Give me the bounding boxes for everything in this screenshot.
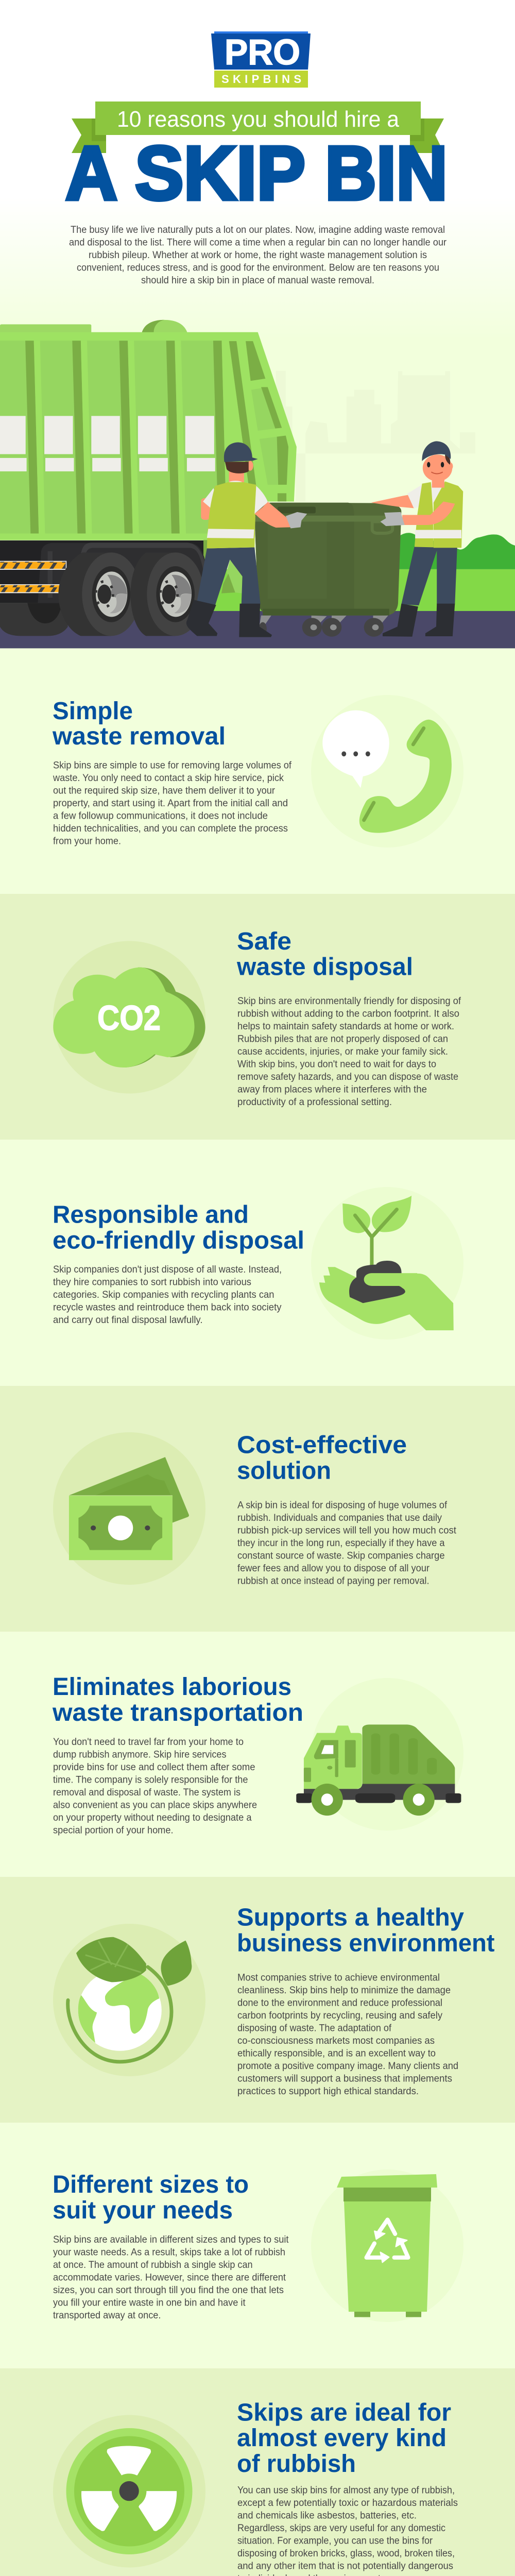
- body text: rubbish pick-up services will tell you how much cost: [237, 1525, 457, 1536]
- body text: cleanliness. Skip bins help to minimize the damage: [237, 1985, 451, 1996]
- heading: business environment: [237, 1930, 495, 1957]
- heading: [52, 1673, 303, 1726]
- heading: waste removal: [52, 723, 226, 750]
- body text: on your property without needing to designate a: [53, 1812, 252, 1823]
- body text: carbon footprints by recycling, reusing and safely: [237, 2010, 442, 2021]
- body text: situation. For example, you can use the bins for: [237, 2536, 433, 2546]
- heading: Supports a healthy: [237, 1904, 464, 1931]
- body text: You can use skip bins for almost any type of rubbish,: [237, 2485, 455, 2496]
- reason 7: different sizes to suit your needs: [53, 2170, 464, 2322]
- icon: telephone with speech bubble: [311, 695, 464, 848]
- intro paragraph: convenient, reduces stress, and is good for the environment. Below are ten reasons you: [77, 263, 439, 273]
- body text: recycle wastes and reintroduce them back into society: [53, 1302, 282, 1313]
- reason 4: cost-effective solution: [53, 1431, 457, 1587]
- body text: rubbish without adding to the carbon footprint. It also: [237, 1009, 459, 1019]
- heading: [237, 1431, 407, 1485]
- body text: they incur in the long run, especially if they have a: [237, 1538, 445, 1549]
- body text: Regardless, skips are very useful for any domestic: [237, 2523, 445, 2534]
- body text: done to the environment and reduce professional: [237, 1998, 442, 2008]
- body text: transported away at once.: [53, 2310, 161, 2321]
- heading: Simple: [53, 698, 133, 725]
- icon: wheeled bin: [254, 503, 401, 637]
- intro paragraph: and disposal to the list. There will come a time when a regular bin can no longer handle our: [69, 237, 447, 248]
- heading: [237, 1904, 495, 1957]
- icon: banknotes: [53, 1432, 205, 1585]
- heading: [53, 1201, 304, 1254]
- intro paragraph: [69, 225, 447, 286]
- body text: helps to maintain safety standards at home or work.: [237, 1021, 454, 1032]
- body text: [53, 760, 292, 847]
- body text: and chemicals like asbestos, batteries, etc.: [237, 2510, 417, 2521]
- heading: Skips are ideal for: [237, 2399, 451, 2427]
- icon: hand holding seedling: [311, 1187, 464, 1340]
- body text: Skip bins are available in different sizes and types to suit: [53, 2234, 289, 2245]
- reason 8: skips are ideal for almost every kind of rubbish: [53, 2399, 458, 2576]
- intro paragraph: rubbish pileup. Whether at work or home, the right waste management solution is: [89, 250, 427, 261]
- body text: dump rubbish anymore. Skip hire services: [53, 1750, 227, 1760]
- body text: time. The company is solely responsible for the: [53, 1774, 248, 1786]
- hero illustration: workers loading a skip bin into a truck: [0, 320, 515, 648]
- heading: Responsible and: [53, 1201, 249, 1228]
- body text: rubbish at once instead of paying per removal.: [237, 1575, 430, 1587]
- body text: [237, 1972, 458, 2097]
- body text: they hire companies to sort rubbish into various: [53, 1277, 251, 1288]
- body text: You don't need to travel far from your home to: [53, 1737, 244, 1748]
- body text: out the required skip size, have them deliver it to your: [53, 785, 276, 796]
- title: A SKIP BIN: SKIP: [135, 131, 305, 216]
- body text: hidden technicalities, and you can complete the process: [53, 823, 288, 834]
- heading: Eliminates laborious: [53, 1673, 291, 1701]
- reason 2: safe waste disposal: [53, 928, 461, 1108]
- body text: customers will support a business that implements: [237, 2073, 452, 2084]
- heading: [237, 2399, 451, 2478]
- body text: [53, 1737, 257, 1836]
- title: A SKIP BIN: [65, 131, 448, 216]
- icon: CO2 cloud: CO2: [97, 998, 161, 1038]
- figure: worker seen from front: [371, 441, 463, 637]
- title: A SKIP BIN: A: [65, 131, 117, 216]
- reason 3: responsible and eco-friendly disposal: [53, 1187, 464, 1340]
- icon: garbage truck: [296, 1678, 464, 1831]
- body text: A skip bin is ideal for disposing of huge volumes of: [237, 1500, 448, 1511]
- heading: Safe: [237, 928, 291, 955]
- icon: CO2 cloud: [53, 941, 205, 1093]
- body text: ethically responsible, and is an excellent way to: [237, 2048, 436, 2059]
- body text: accommodate varies. However, since there are different: [53, 2272, 286, 2283]
- heading: of rubbish: [237, 2450, 356, 2478]
- body text: Skip bins are simple to use for removing large volumes of: [53, 760, 292, 771]
- body text: [237, 996, 461, 1108]
- body text: productivity of a professional setting.: [237, 1097, 392, 1108]
- body text: a few followup communications, it does not include: [53, 811, 268, 821]
- logo: Pro Skipbins: PRO: [225, 32, 300, 72]
- body text: Most companies strive to achieve environmental: [237, 1972, 440, 1984]
- body text: you fill your entire waste in one bin and have it: [53, 2298, 246, 2308]
- title: A SKIP BIN: BIN: [325, 131, 448, 216]
- body text: waste. You only need to contact a skip hire service, pick: [53, 773, 284, 784]
- body text: [237, 1500, 457, 1587]
- figure: worker seen from behind: [186, 443, 307, 637]
- icon: globe with leaves: [53, 1924, 205, 2076]
- body text: removal and disposal of waste. The system is: [53, 1787, 241, 1798]
- heading: solution: [237, 1457, 331, 1485]
- heading: [53, 2171, 249, 2224]
- heading: almost every kind: [237, 2425, 447, 2452]
- body text: Skip bins are environmentally friendly for disposing of: [237, 996, 461, 1007]
- heading: suit your needs: [53, 2197, 233, 2224]
- body text: rubbish. Individuals and companies that use daily: [237, 1513, 442, 1523]
- body text: [53, 1264, 282, 1326]
- body text: practices to support high ethical standards.: [237, 2086, 419, 2097]
- body text: promote a positive company image. Many clients and: [237, 2061, 458, 2072]
- body text: Rubbish piles that are not properly disposed of can: [237, 1033, 448, 1045]
- body text: co-consciousness markets most companies as: [237, 2036, 435, 2046]
- body text: remove safety hazards, and you can dispose of waste: [237, 1072, 458, 1082]
- body text: your waste needs. As a result, skips take a lot of rubbish: [53, 2247, 285, 2258]
- body text: cause accidents, injuries, or make your family sick.: [237, 1046, 448, 1057]
- body text: [53, 2234, 289, 2321]
- body text: disposing of broken bricks, glass, wood, broken tiles,: [237, 2548, 455, 2559]
- logo: Pro Skipbins: [211, 31, 311, 88]
- body text: constant source of waste. Skip companies charge: [237, 1551, 445, 1561]
- reason 6: supports a healthy business environment: [53, 1904, 495, 2097]
- heading: [52, 698, 226, 750]
- intro paragraph: The busy life we live naturally puts a lot on our plates. Now, imagine adding waste removal: [71, 225, 445, 235]
- icon: radiation symbol: [53, 2415, 205, 2568]
- body text: [237, 2485, 458, 2576]
- body text: With skip bins, you don't need to wait for days to: [237, 1059, 436, 1070]
- body text: and carry out final disposal lawfully.: [53, 1315, 203, 1326]
- body text: from your home.: [53, 836, 121, 847]
- heading: waste disposal: [236, 953, 413, 981]
- heading: eco-friendly disposal: [53, 1227, 304, 1254]
- body text: also convenient as you can place skips anywhere: [53, 1800, 257, 1810]
- heading: Different sizes to: [53, 2171, 249, 2198]
- title ribbon: [72, 101, 444, 153]
- intro paragraph: should hire a skip bin in place of manual waste removal.: [141, 275, 374, 286]
- reason 1: simple waste removal: [52, 695, 464, 848]
- body text: except a few potentially toxic or hazardous materials: [237, 2498, 458, 2509]
- heading: waste transportation: [52, 1699, 303, 1726]
- body text: at once. The amount of rubbish a single skip can: [53, 2260, 252, 2270]
- body text: and any other item that is not potentially dangerous: [237, 2561, 453, 2572]
- body text: provide bins for use and collect them after some: [53, 1762, 255, 1773]
- reason 5: eliminates laborious waste transportation: [52, 1673, 464, 1836]
- icon: recycling bin: [311, 2170, 464, 2322]
- body text: categories. Skip companies with recycling plants can: [53, 1290, 274, 1300]
- logo: Pro Skipbins: SKIPBINS: [221, 73, 301, 86]
- body text: Skip companies don't just dispose of all waste. Instead,: [53, 1264, 282, 1275]
- body text: special portion of your home.: [53, 1825, 173, 1836]
- body text: fewer fees and allow you to dispose of all your: [237, 1563, 430, 1574]
- body text: disposing of waste. The adaptation of: [237, 2023, 392, 2034]
- body text: sizes, you can sort through till you find the one that lets: [53, 2285, 284, 2296]
- title ribbon: 10 reasons you should hire a: [117, 107, 400, 132]
- body text: away from places where it interferes with the: [237, 1084, 427, 1095]
- heading: [236, 928, 413, 981]
- heading: Cost-effective: [237, 1431, 407, 1459]
- body text: property, and start using it. Apart from the initial call and: [53, 798, 288, 809]
